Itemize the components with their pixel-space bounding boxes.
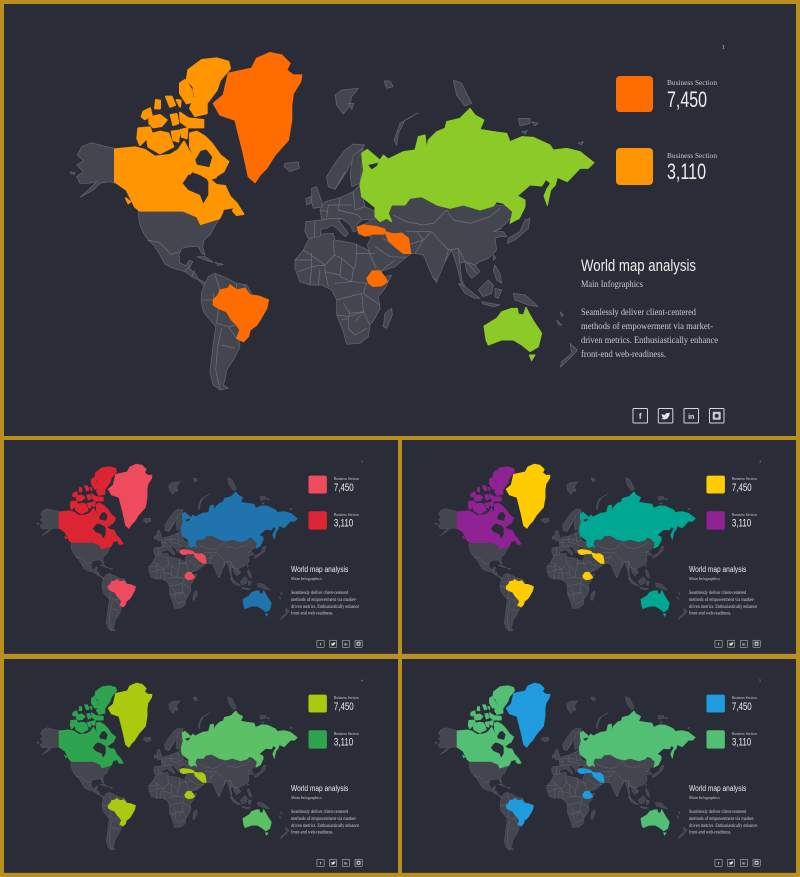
page number: 1 — [722, 45, 725, 51]
social icons — [317, 859, 362, 866]
social icons — [633, 408, 724, 423]
body text: methods of empowerment via market- — [581, 321, 713, 332]
world map — [37, 464, 298, 631]
legend swatch: 7,450 — [616, 76, 653, 112]
legend value: 7,450 — [732, 482, 752, 494]
panel: small slide green — [4, 659, 398, 873]
panel: main slide orange — [4, 4, 796, 436]
icon: facebook: f — [320, 641, 322, 646]
legend swatch: 7,450 — [706, 695, 725, 712]
panel: small slide blue green — [402, 659, 796, 873]
panel background — [4, 659, 398, 873]
social icons — [317, 640, 362, 647]
legend swatch: 3,110 — [616, 148, 653, 185]
legend label: Business Section — [667, 151, 717, 160]
body text: front-end web-readiness. — [689, 831, 731, 836]
legend swatch: 3,110 — [706, 511, 725, 530]
legend label: Business Section — [732, 477, 757, 481]
legend swatch: 7,450 — [308, 476, 327, 493]
legend swatch: 7,450 — [308, 695, 327, 712]
body text: front-end web-readiness. — [581, 349, 666, 360]
icon: twitter — [658, 408, 673, 423]
body text: methods of empowerment via market- — [291, 598, 357, 603]
icon: facebook: f — [639, 412, 642, 421]
icon: twitter — [728, 640, 735, 647]
body text: driven metrics. Enthusiastically enhance — [291, 824, 359, 829]
legend value: 7,450 — [732, 701, 752, 713]
legend value: 3,110 — [334, 737, 353, 749]
icon: instagram — [355, 640, 362, 647]
legend swatch: 7,450 — [706, 476, 725, 493]
legend label: Business Section — [334, 513, 359, 517]
title: World map analysis — [291, 783, 348, 793]
body text: Seamlessly deliver client-centered — [291, 591, 349, 596]
legend label: Business Section — [334, 477, 359, 481]
title: World map analysis — [291, 564, 348, 574]
legend value: 3,110 — [732, 737, 751, 749]
icon: linkedin: in — [344, 642, 347, 646]
icon: instagram — [710, 408, 724, 423]
icon: instagram — [355, 859, 362, 866]
world map — [37, 683, 298, 850]
page number: 2 — [361, 459, 363, 463]
icon: instagram — [753, 640, 760, 647]
icon: facebook: f — [718, 860, 720, 865]
body text: front-end web-readiness. — [291, 831, 333, 836]
body text: driven metrics. Enthusiastically enhance — [291, 605, 359, 610]
page number: 3 — [759, 459, 761, 463]
body text: front-end web-readiness. — [291, 612, 333, 617]
legend value: 3,110 — [334, 518, 353, 530]
icon: twitter — [330, 640, 337, 647]
icon: twitter — [728, 859, 735, 866]
panel background — [402, 659, 796, 873]
icon: linkedin: in — [742, 642, 745, 646]
body text: Seamlessly deliver client-centered — [581, 308, 696, 318]
body text: driven metrics. Enthusiastically enhance — [581, 336, 718, 346]
legend value: 3,110 — [732, 518, 751, 530]
subtitle: Main Infographics — [689, 576, 720, 581]
legend value: 3,110 — [667, 159, 706, 184]
legend label: Business Section — [732, 513, 757, 517]
legend label: Business Section — [667, 78, 717, 87]
icon: linkedin: in — [688, 414, 694, 421]
subtitle: Main Infographics — [581, 279, 643, 289]
body text: Seamlessly deliver client-centered — [689, 591, 747, 596]
body text: methods of empowerment via market- — [689, 817, 755, 822]
body text: front-end web-readiness. — [689, 612, 731, 617]
legend swatch: 3,110 — [308, 511, 327, 530]
icon: facebook: f — [718, 641, 720, 646]
page number: 5 — [759, 678, 761, 682]
icon: twitter — [330, 859, 337, 866]
subtitle: Main Infographics — [291, 576, 322, 581]
subtitle: Main Infographics — [291, 795, 322, 800]
subtitle: Main Infographics — [689, 795, 720, 800]
body text: methods of empowerment via market- — [689, 598, 755, 603]
title: World map analysis — [689, 783, 746, 793]
page number: 4 — [361, 678, 363, 682]
world map — [435, 683, 696, 850]
body text: driven metrics. Enthusiastically enhance — [689, 824, 757, 829]
legend label: Business Section — [732, 696, 757, 700]
legend swatch: 3,110 — [706, 730, 725, 749]
body text: driven metrics. Enthusiastically enhance — [689, 605, 757, 610]
social icons — [715, 640, 760, 647]
legend label: Business Section — [334, 696, 359, 700]
legend value: 7,450 — [334, 701, 354, 713]
legend value: 7,450 — [334, 482, 354, 494]
legend label: Business Section — [732, 732, 757, 736]
body text: Seamlessly deliver client-centered — [689, 810, 747, 815]
legend label: Business Section — [334, 732, 359, 736]
panel background — [4, 4, 796, 436]
legend value: 7,450 — [667, 87, 707, 112]
legend swatch: 3,110 — [308, 730, 327, 749]
panel: small slide yellow purple teal — [402, 440, 796, 654]
panel background — [4, 440, 398, 654]
panel: small slide red — [4, 440, 398, 654]
social icons — [715, 859, 760, 866]
icon: instagram — [753, 859, 760, 866]
panel background — [402, 440, 796, 654]
icon: linkedin: in — [344, 861, 347, 865]
title: World map analysis — [581, 256, 696, 275]
icon: facebook: f — [320, 860, 322, 865]
title: World map analysis — [689, 564, 746, 574]
world map — [70, 53, 594, 390]
body text: methods of empowerment via market- — [291, 817, 357, 822]
body text: Seamlessly deliver client-centered — [291, 810, 349, 815]
icon: linkedin: in — [742, 861, 745, 865]
world map — [435, 464, 696, 631]
